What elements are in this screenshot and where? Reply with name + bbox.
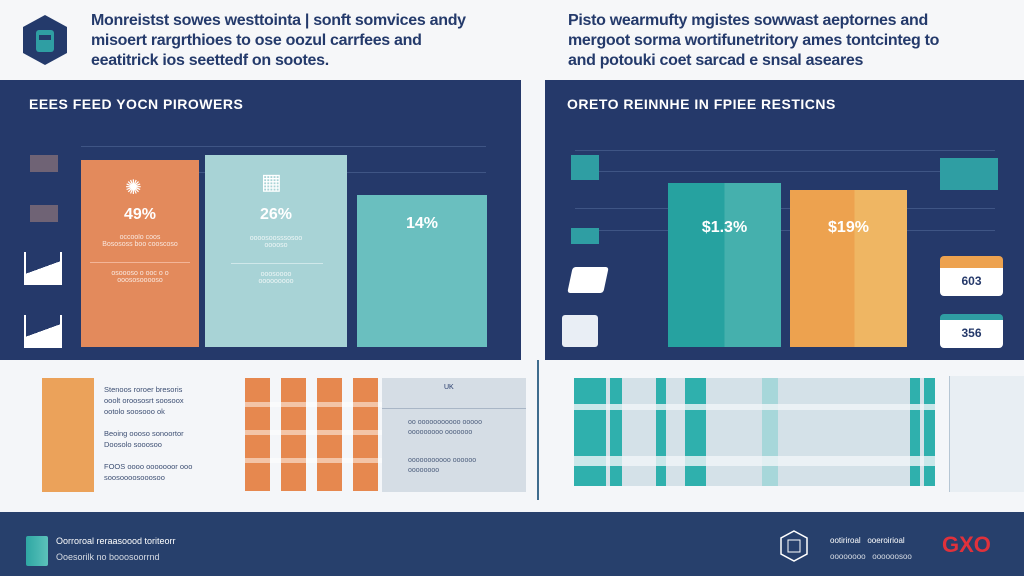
- bar: light teal 26%: ooooso: [265, 242, 287, 249]
- bar: orange 49%: 49%: [124, 206, 156, 223]
- text block: Stenoos roroer bresoris: [104, 385, 182, 394]
- text block: soosoooosooosoo: [104, 473, 165, 482]
- bar: light teal 26%: ooooooooo: [258, 278, 294, 285]
- text block: [104, 385, 192, 482]
- icon: documents: [24, 252, 62, 348]
- bar: orange 49%: Bosososs boo cooscoso: [102, 241, 178, 248]
- tag labels: [30, 155, 58, 222]
- gray info panel: UK: [444, 384, 454, 391]
- tag labels left: [571, 155, 599, 244]
- title left: Monreistst sowes westtointa | sonft somvices andy misoert rargrthioes to ose oozul carrfees and eeatitrick ios seettedf on sootes.: [91, 12, 466, 69]
- bar: light teal 26%: [205, 155, 347, 347]
- bar: light teal 26%: 26%: [260, 206, 292, 223]
- text block: ootolo soosooo ok: [104, 407, 165, 416]
- text block: FOOS oooo ooooooor ooo: [104, 462, 192, 471]
- panel: right chart: [545, 80, 1024, 360]
- footer text left: Oorroroal reraasoood toriteorr: [56, 536, 176, 546]
- text block: ooolt oroososrt soosoox: [104, 396, 184, 405]
- gray info panel: [382, 378, 526, 492]
- footer text right: ootiriroal ooeroirioal: [830, 536, 905, 545]
- footer text left: Ooesorilk no booosoorrnd: [56, 552, 160, 562]
- icon: hexagon logo: [23, 15, 67, 65]
- logo: GXO: GXO: [942, 532, 991, 557]
- bar: light teal 26%: ooosoooo: [261, 271, 291, 278]
- icon: stacks: [562, 267, 608, 347]
- bar: orange $19%: $19%: [828, 219, 869, 236]
- bar: orange 49%: ooososooooso: [117, 277, 163, 284]
- gray info panel: oo ooooooooooo ooooo: [408, 419, 482, 426]
- orange side block: [42, 378, 94, 492]
- text block: Doosolo sooosoo: [104, 440, 162, 449]
- heading left: EEES FEED YOCN PIROWERS: [29, 96, 243, 112]
- footer text right: oooooooo oooooosoo: [830, 552, 912, 561]
- legend right: 603: [961, 274, 982, 288]
- bar: teal 14%: [357, 195, 487, 347]
- gray info panel: ooooooooooo oooooo: [408, 457, 476, 464]
- legend right: 356: [961, 326, 982, 340]
- title right: Pisto wearmufty mgistes sowwast aeptornes and mergoot sorma wortifunetritory ames tontcinteg to and potouki coet sarcad e snsal aseares: [568, 12, 939, 69]
- bar: teal $1.3%: [668, 183, 781, 347]
- bar: light teal 26%: ▦: [261, 169, 282, 194]
- bar: orange 49%: ✺: [125, 177, 142, 199]
- grid: teal bars: [574, 378, 935, 486]
- panel: left chart: [0, 80, 521, 360]
- side mini charts: [949, 376, 1024, 492]
- bar: teal $1.3%: $1.3%: [702, 219, 747, 236]
- gray info panel: ooooooooo ooooooo: [408, 429, 472, 436]
- header band: [0, 0, 1024, 80]
- bar: orange 49%: osoooso o ooc o o: [111, 270, 169, 277]
- legend right: [940, 158, 1003, 348]
- footer text right: [830, 536, 912, 561]
- icon: footer book: [26, 536, 48, 566]
- bar: light teal 26%: oooosoosssosoo: [250, 235, 302, 242]
- icon: footer hexagon: [780, 530, 808, 562]
- gray info panel: oooooooo: [408, 467, 439, 474]
- bar: orange $19%: [790, 190, 907, 347]
- text block: Beoing oooso sonoortor: [104, 429, 184, 438]
- bar: orange 49%: occoolo coos: [120, 234, 160, 241]
- grid: orange squares: [245, 378, 383, 491]
- footer text left: [56, 536, 176, 562]
- bar: teal 14%: 14%: [406, 215, 438, 232]
- footer: [0, 512, 1024, 576]
- heading right: ORETO REINNHE IN FPIEE RESTICNS: [567, 96, 836, 112]
- bar: orange 49%: [81, 160, 199, 347]
- bottom left section: [42, 378, 526, 492]
